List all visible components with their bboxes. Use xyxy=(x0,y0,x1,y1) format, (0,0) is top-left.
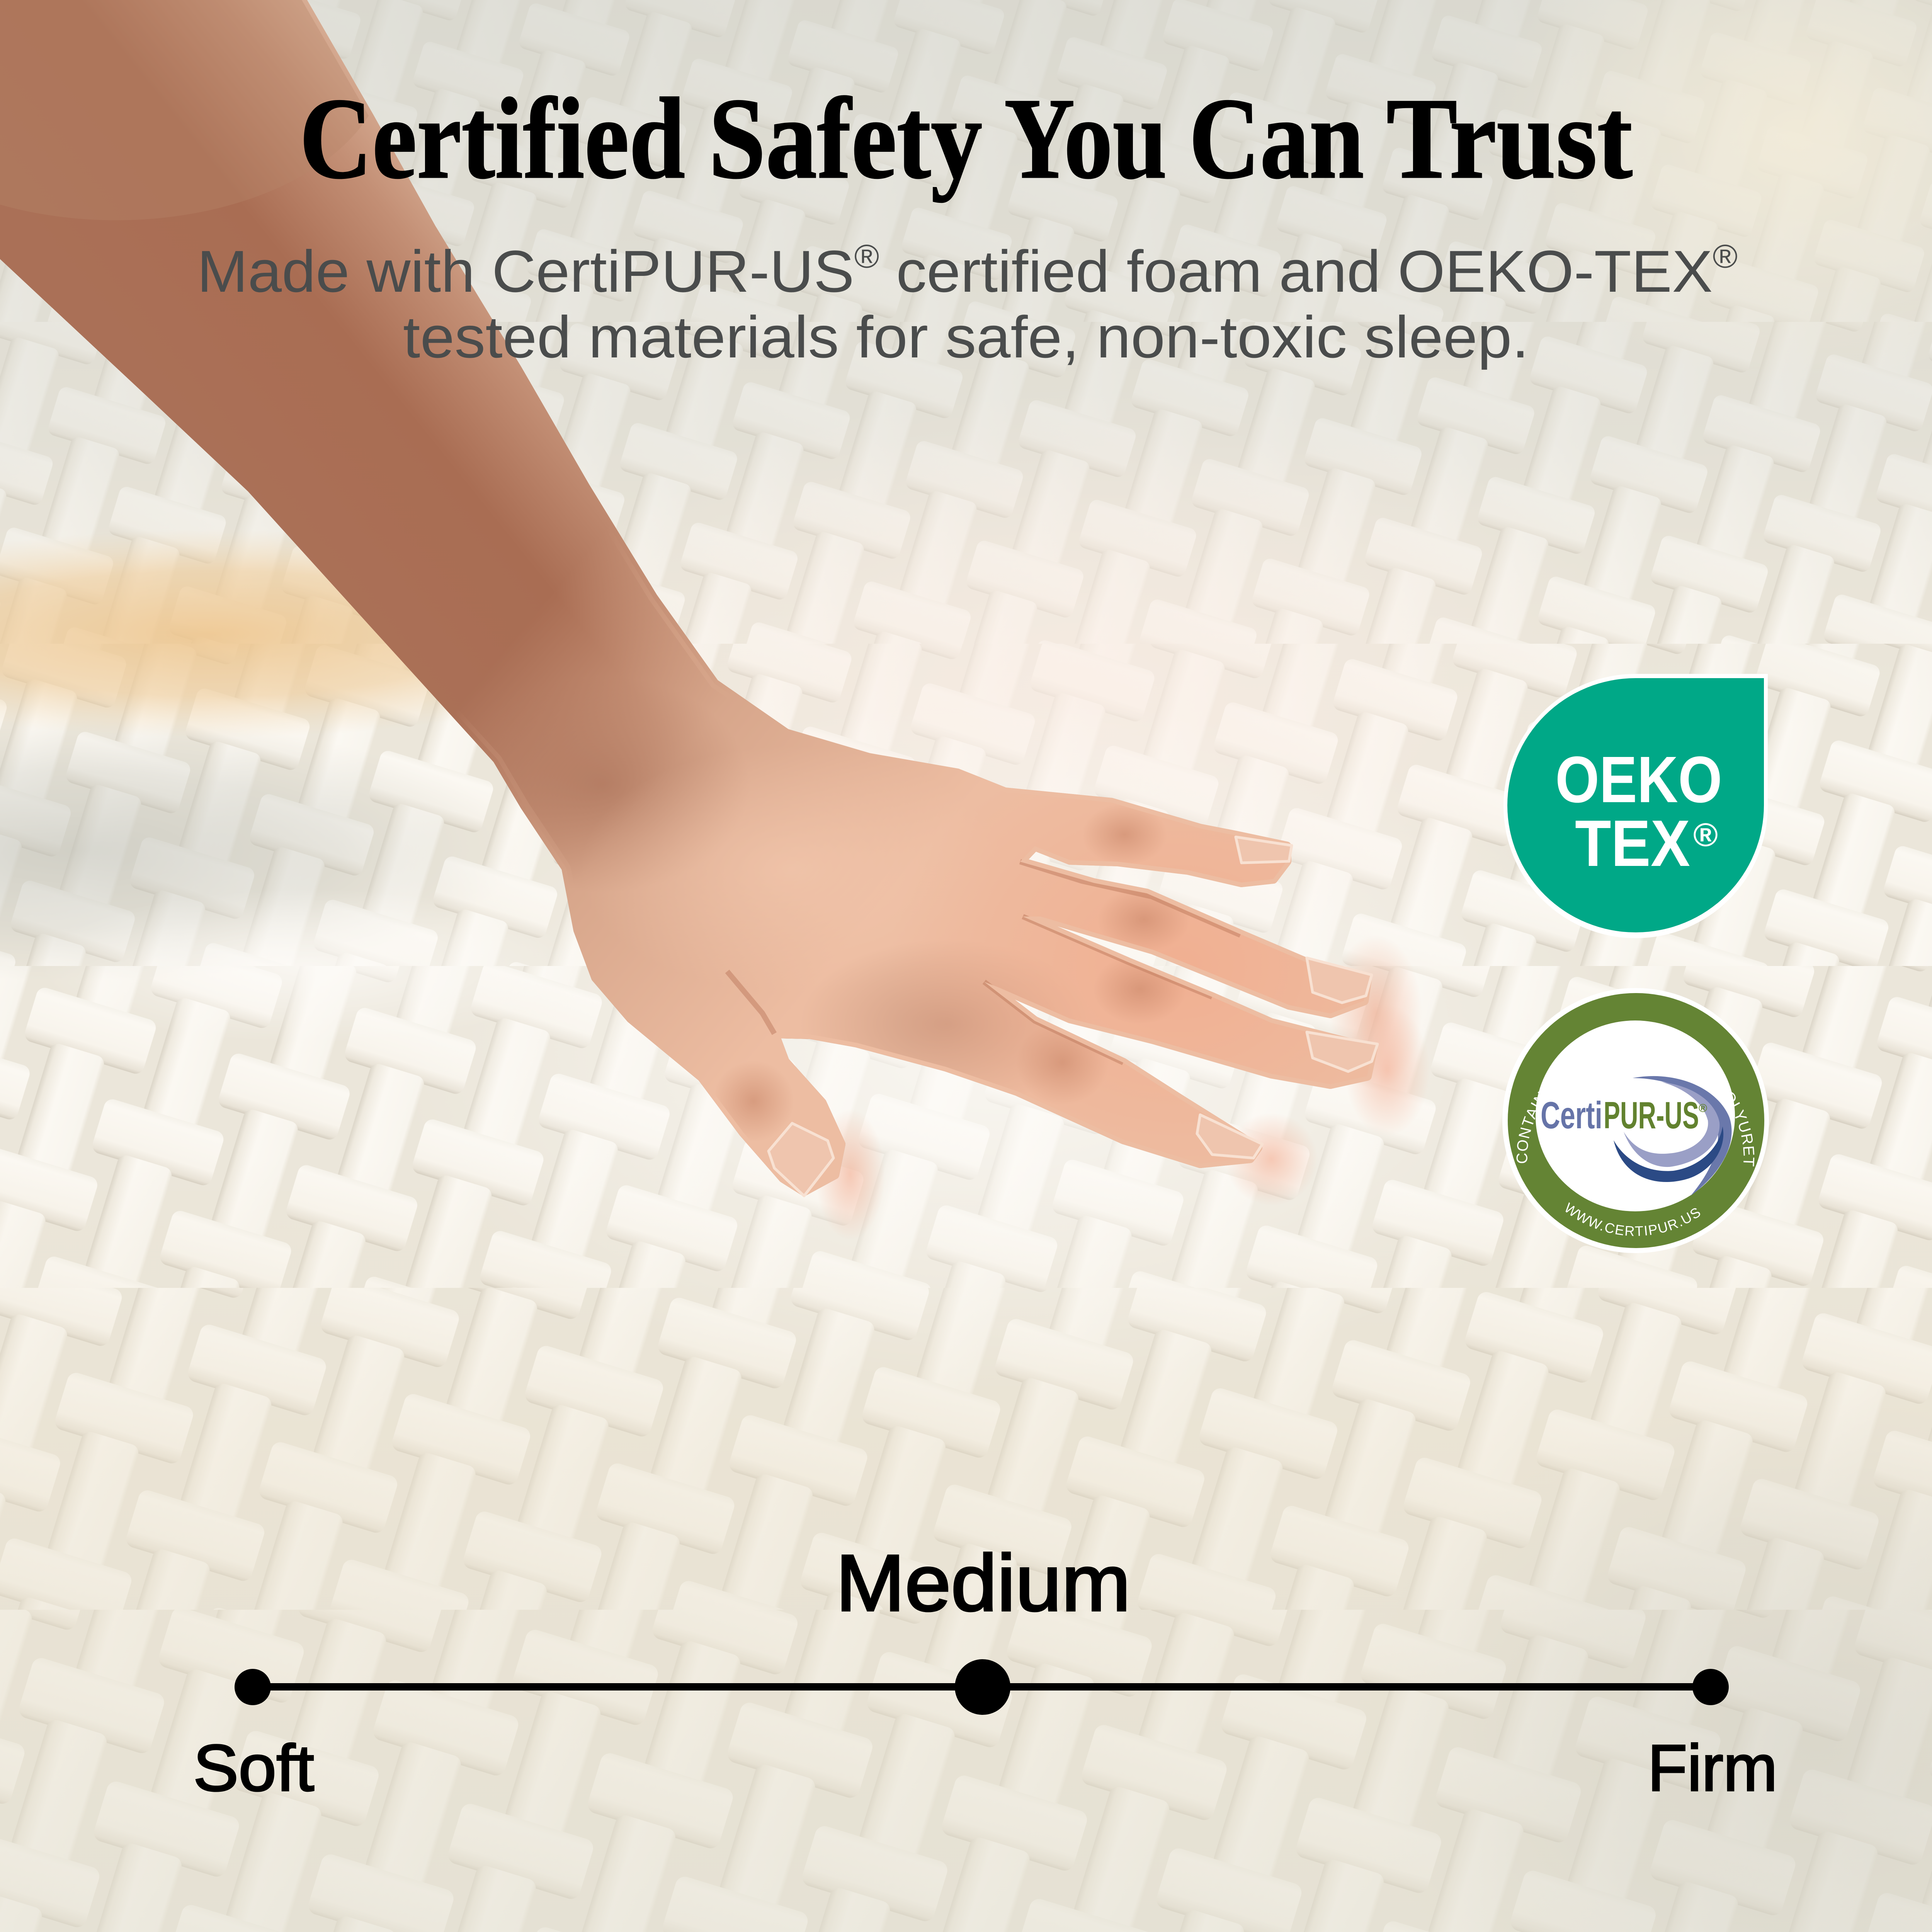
badge: OEKO-TEX: TEX xyxy=(1575,807,1690,880)
scale track xyxy=(253,1683,1711,1690)
title: You xyxy=(1004,74,1167,202)
subtitle text block xyxy=(197,238,1738,370)
badge: OEKO-TEX: ® xyxy=(1693,817,1718,854)
scale end dot: firm xyxy=(1692,1669,1729,1705)
title: Trust xyxy=(1386,74,1634,202)
firmness scale xyxy=(193,1538,1777,1805)
scale marker: medium xyxy=(955,1659,1010,1715)
subtitle text block: Made with CertiPUR-US xyxy=(197,238,834,304)
subtitle text block: ® xyxy=(1713,238,1738,275)
badge: CertiPUR-US: PUR-US xyxy=(1604,1094,1699,1136)
scale end dot: soft xyxy=(235,1669,271,1705)
fingernails xyxy=(769,837,1378,1196)
contact glow around fingertips and thumb xyxy=(815,935,1430,1240)
badge: OEKO-TEX: OEKO xyxy=(1555,743,1722,816)
badge: CertiPUR-US: Certi xyxy=(1541,1094,1602,1136)
badge: CertiPUR-US: ® xyxy=(1699,1102,1707,1115)
subtitle text block: certified foam and OEKO-TEX xyxy=(879,238,1713,304)
scale label: Medium: Medium xyxy=(836,1538,1131,1628)
scale label: Soft: Soft xyxy=(193,1731,314,1805)
badge: CertiPUR-US: CONTAINS CERTIFIED FLEXIBLE POLYURETHANE FOAM xyxy=(0,0,1757,1167)
subtitle text block: tested materials for safe, non-toxic sleep. xyxy=(403,304,1529,370)
title xyxy=(299,74,1634,203)
title: Certified xyxy=(299,74,685,202)
title: Safety xyxy=(709,74,982,203)
arm and hand xyxy=(0,0,1468,1198)
badge: CertiPUR-US: WWW.CERTIPUR.US xyxy=(1561,1200,1703,1239)
arm and hand shading xyxy=(0,0,1468,1198)
subtitle text block: ® xyxy=(854,238,879,275)
scale label: Firm: Firm xyxy=(1648,1731,1777,1805)
badge: OEKO-TEX xyxy=(1503,674,1768,938)
title: Can xyxy=(1189,74,1364,202)
